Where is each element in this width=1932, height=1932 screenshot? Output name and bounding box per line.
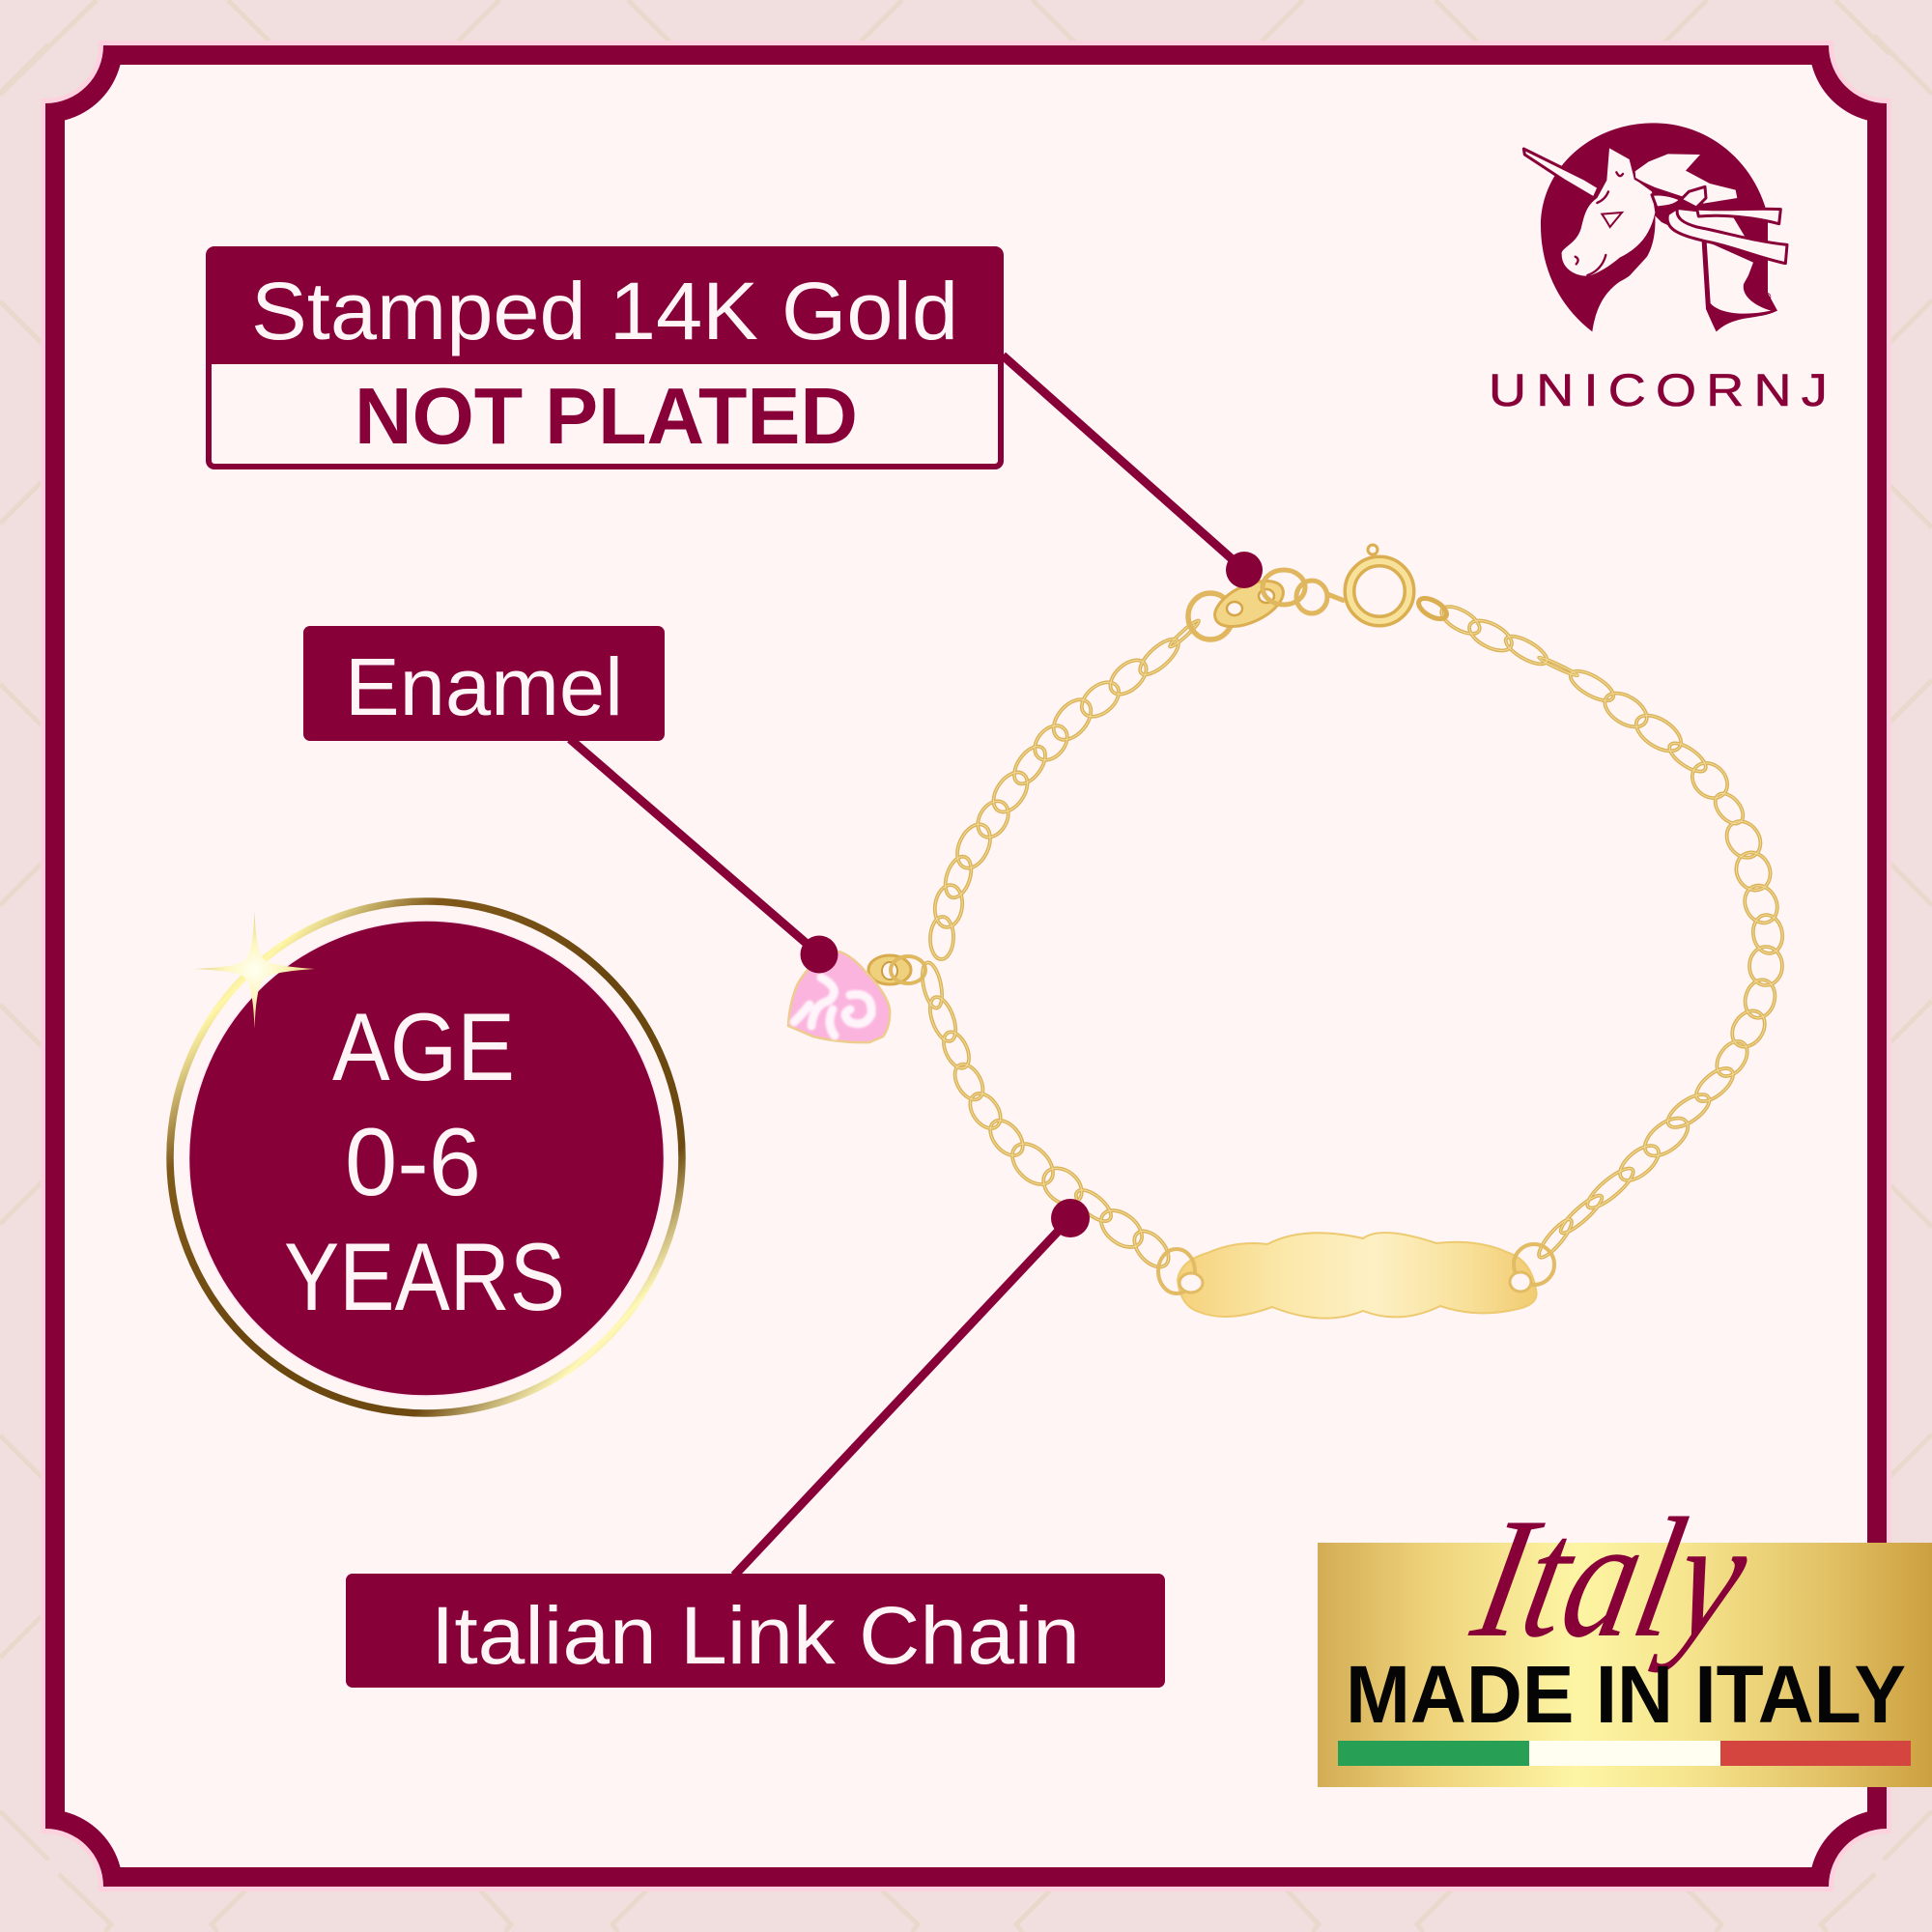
text: stamped 14K gold: Stamped 14K Gold [251,266,958,356]
text: years: YEARS [284,1223,565,1330]
bracelet [788,545,1785,1319]
mane under bow [1674,210,1747,240]
name plate [1158,1233,1554,1319]
leader line: enamel label to heart [570,739,819,954]
label: stamped 14K gold not plated [207,247,1003,467]
leader line: chain label to chain [734,1218,1070,1576]
label: enamel [303,626,665,741]
text: 0-6: 0-6 [345,1108,481,1215]
leader dots [800,552,1263,1237]
icon: unicorn [1523,123,1787,332]
text: brand name: UNICORNJ [1489,364,1828,415]
text: italy script: Italy [1460,1483,1764,1673]
text: age: AGE [332,993,515,1100]
text: not plated: NOT PLATED [355,371,858,461]
italian flag stripe [1338,1741,1911,1766]
chain links [919,601,1785,1273]
label: italian link chain [346,1574,1165,1688]
made in italy badge [1318,1483,1932,1787]
leader line: gold label to clasp [1003,355,1244,570]
mane [1635,154,1737,204]
text: made in italy: MADE IN ITALY [1346,1649,1906,1740]
age badge [170,901,682,1413]
burgundy disc [189,921,665,1396]
disc [1541,123,1777,331]
horn [1523,149,1599,198]
clasp [1188,545,1450,639]
icon: sparkle [194,911,315,1029]
head [1562,148,1655,276]
neck right [1707,242,1771,314]
gold ring [170,901,682,1413]
label: enamel: Enamel [345,641,623,732]
label: italian link chain: Italian Link Chain [431,1590,1080,1681]
face details [1576,172,1655,275]
neck cut-out [1592,215,1717,332]
heart charm [788,952,925,1042]
ribbon and bow [1652,186,1787,264]
brand logo [1489,123,1828,415]
registered mark: ® [1763,290,1772,303]
